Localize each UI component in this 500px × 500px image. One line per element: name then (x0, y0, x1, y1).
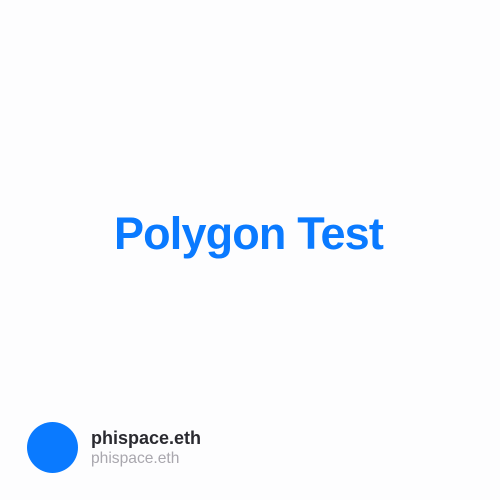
account name: phispace.eth (91, 428, 201, 448)
title: Polygon Test (114, 208, 383, 259)
account handle: phispace.eth (91, 450, 179, 467)
avatar circle (27, 422, 78, 473)
